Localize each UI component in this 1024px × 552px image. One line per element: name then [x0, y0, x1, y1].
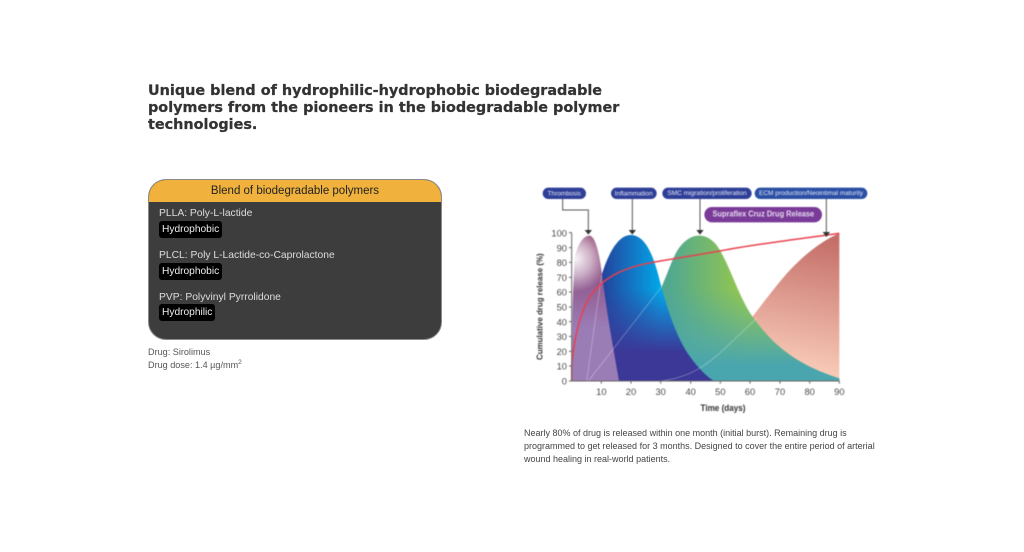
drug details: Drug: Sirolimus: [148, 347, 210, 357]
description: Nearly 80% of drug is released within one month (initial burst). Remaining drug is: [524, 428, 847, 438]
drug details: Drug dose: 1.4 µg/mm2: [148, 359, 242, 370]
y-axis numbers: 50: [557, 303, 567, 313]
x-axis numbers: 50: [715, 387, 726, 397]
tag: hydrophobic: [159, 263, 222, 280]
polymer: PLCL: PLCL: Poly L-Lactide-co-Caprolactone: [159, 250, 335, 261]
y-axis numbers: 0: [562, 377, 567, 387]
panel heading: Blend of biodegradable polymers: [211, 185, 379, 197]
pill: inflammation: [611, 188, 657, 199]
panel heading: [149, 180, 441, 202]
panel: blend of biodegradable polymers: [148, 179, 442, 340]
arrows: [563, 199, 826, 233]
y-axis numbers: 90: [557, 243, 567, 253]
pill: thrombosis: [543, 188, 586, 199]
y-axis numbers: 70: [557, 273, 567, 283]
description: wound healing in real-world patients.: [524, 454, 670, 464]
title: technologies.: [148, 117, 257, 133]
polymer: PLLA: PLLA: Poly-L-lactide: [159, 208, 252, 219]
pill: thrombosis: Thrombosis: [548, 190, 582, 197]
y-axis numbers: 20: [557, 347, 567, 357]
curve: thrombosis: [572, 236, 619, 381]
pill: ECM production: ECM production/Neointimal maturity: [759, 190, 864, 197]
pill: Supraflex Cruz drug release: [704, 207, 822, 222]
y-axis label: Cumulative drug release (%): [534, 253, 544, 360]
y-axis numbers: 80: [557, 258, 567, 268]
curve: ECM production: [660, 233, 839, 381]
description: programmed to get released for 3 months. Designed to cover the entire period of arterial: [524, 441, 875, 451]
polymer: PVP: PVP: Polyvinyl Pyrrolidone: [159, 292, 281, 303]
x-axis numbers: 70: [775, 387, 785, 397]
x-axis numbers: 30: [655, 387, 666, 397]
pill: SMC migration: SMC migration/proliferation: [667, 190, 747, 197]
title: [148, 82, 620, 133]
chart: cumulative drug release: [534, 186, 868, 414]
pill: Supraflex Cruz drug release: Supraflex Cruz Drug Release: [712, 210, 815, 219]
pill: inflammation: Inflammation: [615, 190, 653, 197]
y-axis numbers: 10: [557, 362, 567, 372]
faint curve traces: [587, 275, 757, 381]
pill: SMC migration: [662, 188, 752, 199]
curve: cumulative drug release: [572, 233, 839, 381]
y-axis numbers: [551, 228, 567, 387]
drug details: [148, 347, 242, 370]
y-axis numbers: 60: [557, 288, 567, 298]
x-axis numbers: 60: [745, 387, 755, 397]
x-axis label: Time (days): [700, 403, 746, 413]
description: [524, 428, 875, 464]
y-axis numbers: 30: [557, 332, 567, 342]
x-axis numbers: 20: [626, 387, 636, 397]
arrowheads: [585, 230, 830, 237]
tag: hydrophobic: Hydrophobic: [162, 224, 219, 235]
x-axis numbers: 10: [596, 387, 607, 397]
x-axis numbers: 40: [685, 387, 696, 397]
x-axis numbers: 90: [834, 387, 845, 397]
x-axis numbers: 80: [804, 387, 815, 397]
tag: hydrophobic: [159, 221, 222, 238]
tag: hydrophobic: Hydrophobic: [162, 266, 219, 277]
y-axis numbers: 40: [557, 317, 567, 327]
curve: inflammation: [587, 235, 714, 381]
tag: hydrophilic: Hydrophilic: [162, 307, 212, 318]
x-axis numbers: [596, 387, 845, 397]
title: Unique blend of hydrophilic-hydrophobic biodegradable: [148, 82, 602, 98]
y-axis numbers: 100: [551, 228, 567, 238]
axes: [569, 233, 839, 384]
pill: ECM production: [755, 188, 867, 199]
curve: SMC migration: [588, 236, 839, 381]
title: polymers from the pioneers in the biodegradable polymer: [148, 100, 619, 116]
tag: hydrophilic: [159, 304, 215, 321]
